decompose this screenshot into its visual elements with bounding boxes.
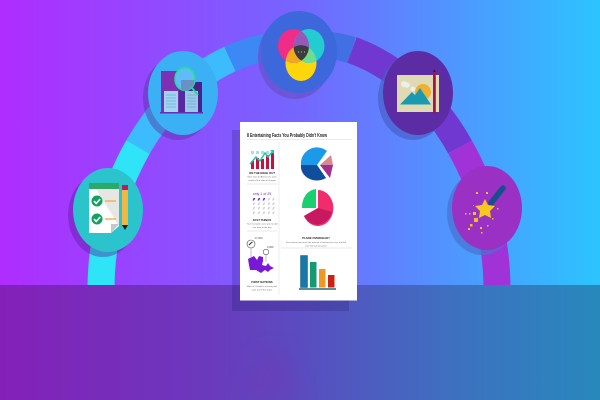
pie caption: PLANE OVERHEAD? (302, 236, 330, 240)
pictogram caption: one hour to the day (253, 226, 272, 229)
background (0, 0, 600, 285)
icon: picture with pencil (397, 69, 439, 114)
map caption: work out of the states (252, 288, 273, 292)
document title: 8 Entertaining Facts You Probably Didn't Know (247, 133, 327, 139)
pictogram (252, 192, 275, 214)
node: research (143, 51, 218, 140)
growth chart (250, 150, 274, 169)
map caption: FIRST NATIONS (251, 280, 273, 284)
pie chart 1 (301, 147, 333, 180)
pie caption: Ever notice how much the amount of money has risen and fell (286, 241, 346, 244)
map of Canada: 17,000 (254, 236, 263, 240)
pie caption (286, 236, 346, 248)
icon: venn (278, 29, 324, 81)
node: checklist (68, 168, 143, 257)
map of Canada (247, 236, 274, 273)
map caption: Most of Canada's crossing that (247, 285, 277, 288)
map of Canada: 3,000 (267, 245, 274, 249)
growth caption: ON THE EDGE OUT (249, 171, 275, 175)
arch (101, 44, 497, 290)
pie caption: over the last ten years (305, 244, 328, 248)
node: magic wand (447, 166, 522, 255)
pictogram caption: Your 5 people cause you to add (247, 222, 278, 226)
growth caption (248, 171, 277, 182)
node: picture (378, 51, 453, 140)
growth caption: More than 47 Americans work (248, 176, 277, 178)
pictogram caption (247, 218, 278, 229)
pictogram: only 1 of 25 (253, 192, 271, 196)
document (240, 122, 357, 300)
pictogram caption: FAST THINGS (253, 218, 271, 222)
map caption (247, 280, 277, 292)
icon: checklist (89, 183, 128, 233)
pie chart 2 (302, 189, 333, 226)
node: venn diagram (258, 11, 337, 99)
document shadow (232, 130, 349, 311)
icon: magic wand (465, 188, 503, 234)
floor (0, 285, 600, 400)
bar chart (299, 256, 336, 290)
icon: documents with magnifier (160, 68, 203, 114)
growth caption: inside of the state of Oregon (248, 179, 277, 182)
